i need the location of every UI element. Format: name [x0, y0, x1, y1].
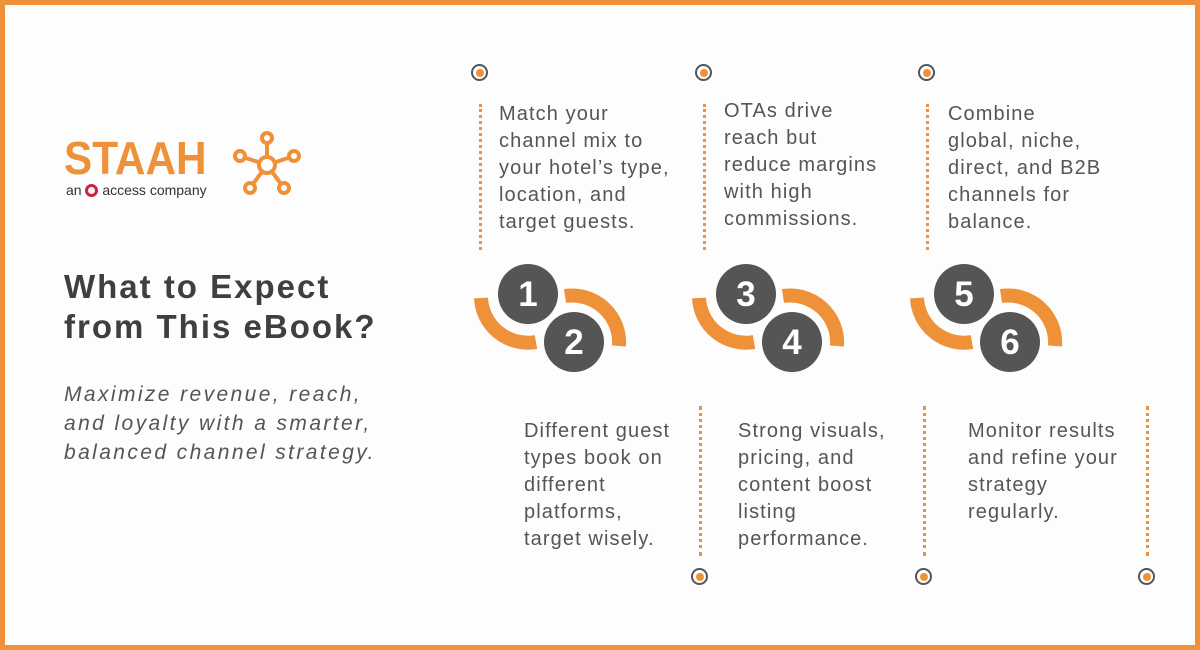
subtitle: Maximize revenue, reach,	[64, 383, 362, 406]
text: step 1: location, and	[499, 184, 627, 206]
text: step 3: reduce margins	[724, 154, 877, 176]
text: step 5: global, niche,	[948, 130, 1081, 152]
text: step 6: Monitor results	[968, 420, 1116, 442]
badge pair 5-6: 6	[1000, 323, 1020, 362]
text: step 1: your hotel’s type,	[499, 157, 670, 179]
text: step 2: platforms,	[524, 501, 623, 523]
text: step 1	[499, 103, 670, 233]
text: step 4: pricing, and	[738, 447, 855, 469]
text: step 2: Different guest	[524, 420, 670, 442]
text: step 4: performance.	[738, 528, 869, 550]
badge pair 1-2: 2	[564, 323, 584, 362]
text: step 5: direct, and B2B	[948, 157, 1101, 179]
timeline dots and lines	[471, 64, 488, 81]
text: step 6: regularly.	[968, 501, 1060, 523]
subtitle	[64, 383, 376, 464]
badge pair 5-6: 5	[954, 275, 974, 314]
badge pair 3-4: 4	[782, 323, 802, 362]
text: step 2	[524, 420, 670, 550]
badge pair 1-2	[481, 264, 619, 372]
text: step 3: commissions.	[724, 208, 858, 230]
text: step 6: and refine your	[968, 447, 1118, 469]
text: step 2: different	[524, 474, 606, 496]
text: step 1: channel mix to	[499, 130, 643, 152]
text: step 4	[738, 420, 886, 550]
text: step 3: OTAs drive	[724, 100, 834, 122]
text: step 4: Strong visuals,	[738, 420, 886, 442]
logo tagline: an access company	[66, 182, 207, 198]
subtitle: and loyalty with a smarter,	[64, 412, 372, 435]
text: step 3: with high	[724, 181, 813, 203]
text: step 5: channels for	[948, 184, 1070, 206]
text: step 4: content boost	[738, 474, 872, 496]
text: step 3: reach but	[724, 127, 817, 149]
badge pair 3-4: 3	[736, 275, 756, 314]
heading: from This eBook?	[64, 308, 377, 345]
text: step 2: target wisely.	[524, 528, 655, 550]
text: step 5	[948, 103, 1101, 233]
badge pair 5-6	[917, 264, 1055, 372]
text: step 4: listing	[738, 501, 797, 523]
text: step 3	[724, 100, 877, 230]
heading: What to Expect	[64, 268, 330, 305]
text: step 1: Match your	[499, 103, 609, 125]
subtitle: balanced channel strategy.	[64, 441, 376, 464]
text: step 5: Combine	[948, 103, 1036, 125]
logo wordmark: STAAH	[64, 132, 207, 184]
heading	[64, 268, 377, 345]
text: step 6	[968, 420, 1118, 523]
text: step 6: strategy	[968, 474, 1048, 496]
badge pair 3-4	[699, 264, 837, 372]
text: step 5: balance.	[948, 211, 1032, 233]
text: step 2: types book on	[524, 447, 663, 469]
badge pair 1-2: 1	[518, 275, 538, 314]
text: step 1: target guests.	[499, 211, 636, 233]
icon: network	[233, 131, 301, 195]
logo	[64, 131, 301, 198]
